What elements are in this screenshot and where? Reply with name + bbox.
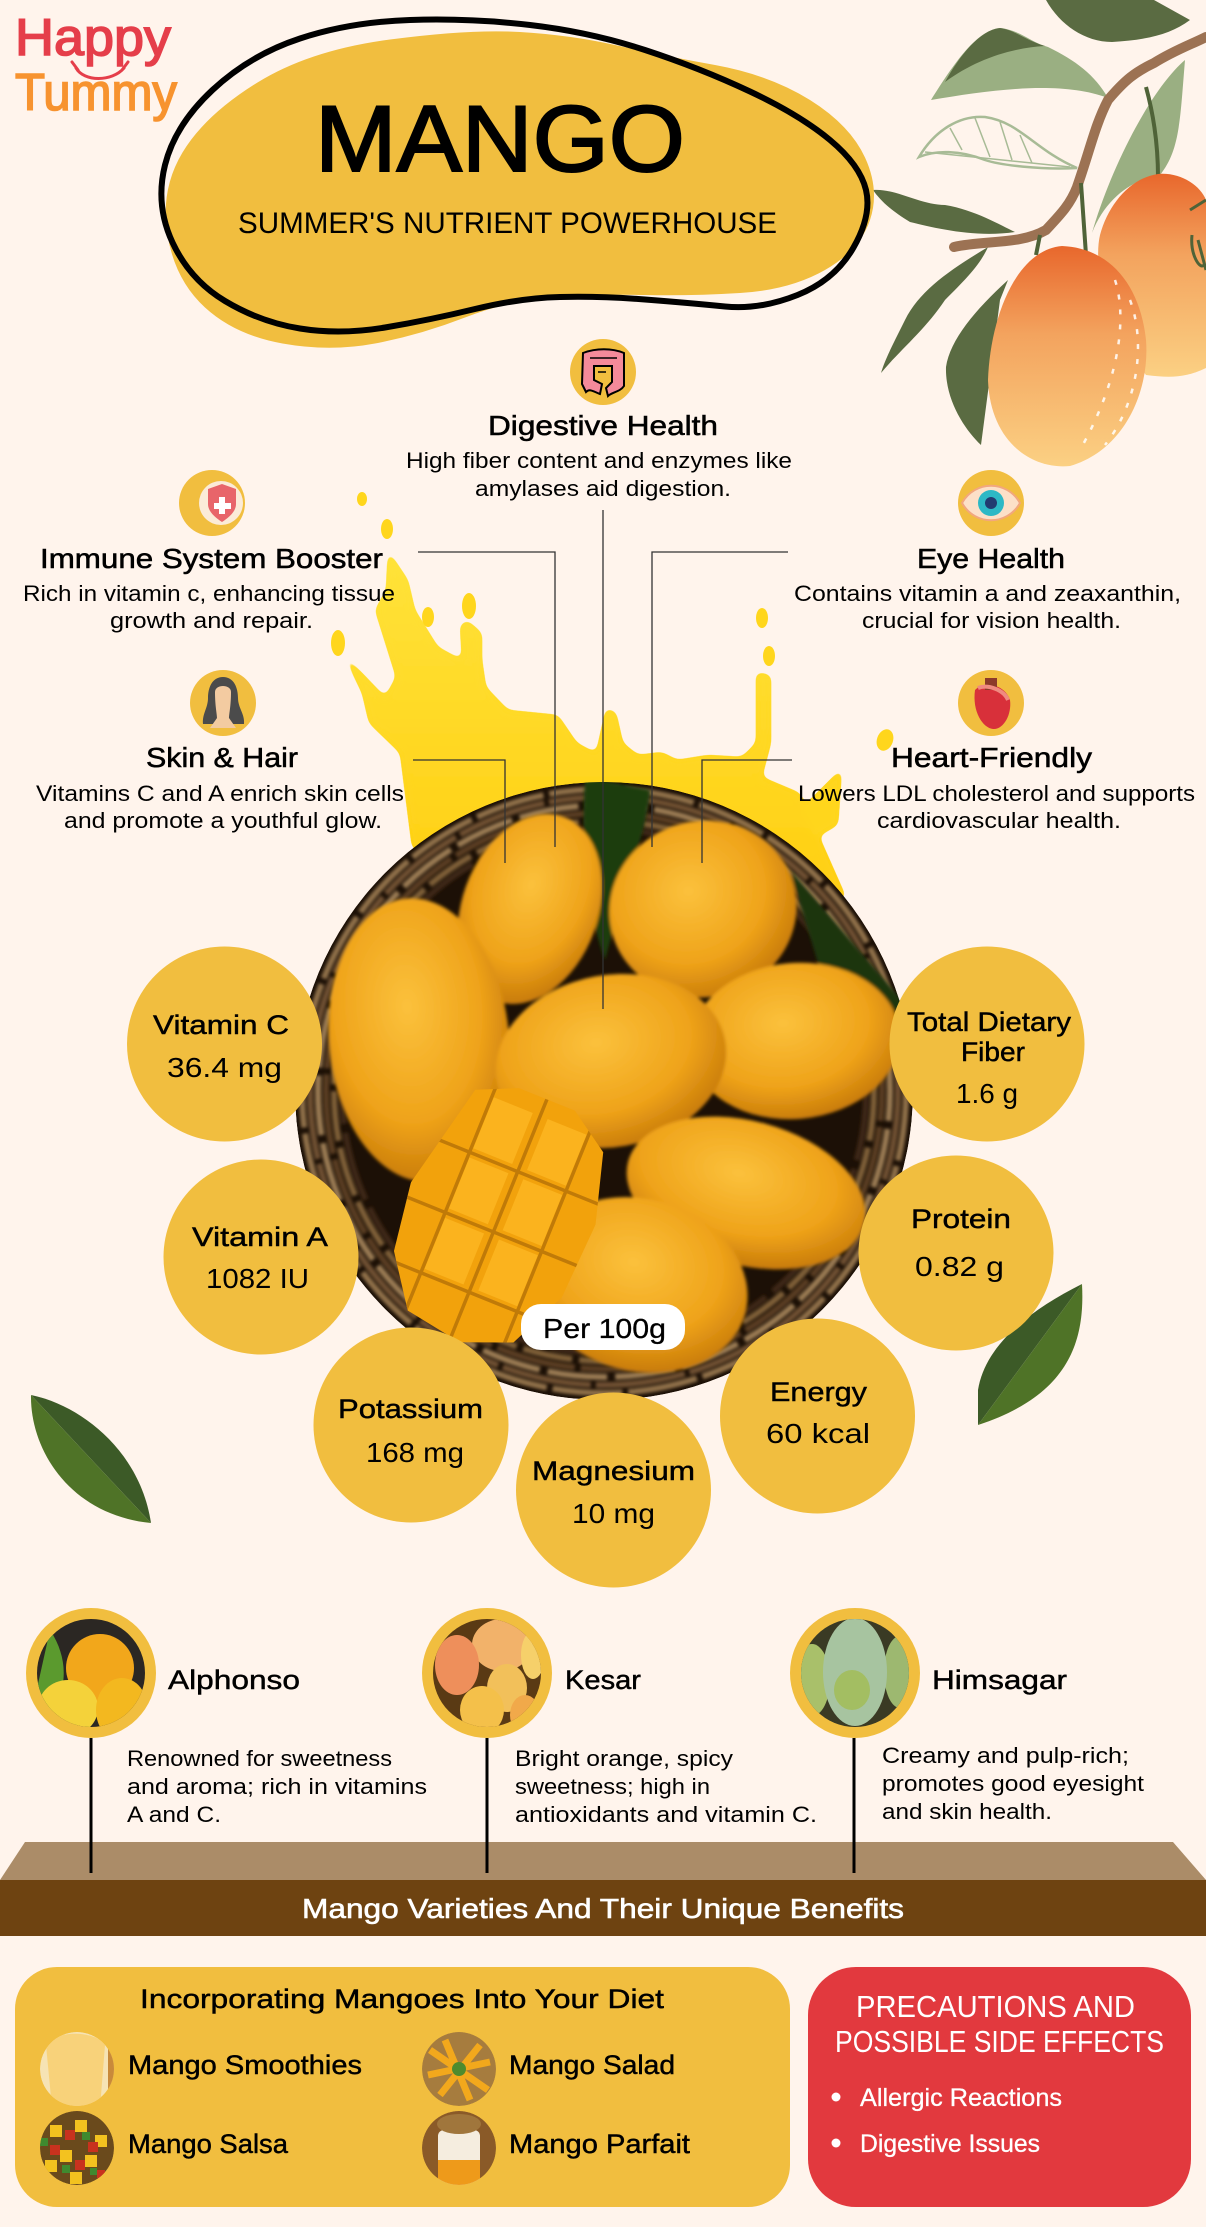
description: A and C. bbox=[127, 1802, 221, 1827]
stat: vitamin c: Vitamin C bbox=[153, 1010, 289, 1040]
stat: vitamin c: 36.4 mg bbox=[167, 1052, 282, 1083]
description: and skin health. bbox=[882, 1799, 1052, 1824]
panel: immune system booster bbox=[23, 470, 395, 633]
heading: Digestive Health bbox=[488, 410, 718, 441]
icon: heart bbox=[958, 670, 1024, 736]
text block bbox=[36, 781, 404, 833]
text block: and promote a youthful glow. bbox=[64, 808, 382, 833]
panel: heart friendly bbox=[798, 670, 1195, 833]
decorative leaf right bbox=[978, 1284, 1082, 1425]
stat: energy bbox=[720, 1318, 915, 1514]
stat: protein: Protein bbox=[911, 1204, 1011, 1234]
icon: intestine bbox=[570, 339, 636, 405]
text block bbox=[23, 581, 395, 633]
text block: amylases aid digestion. bbox=[475, 476, 731, 501]
logo: Happy Tummy bbox=[15, 9, 177, 122]
name: Himsagar bbox=[932, 1665, 1067, 1695]
stat: total dietary fiber bbox=[890, 946, 1084, 1142]
heading: Heart-Friendly bbox=[891, 742, 1092, 773]
stat: potassium: Potassium bbox=[338, 1394, 483, 1424]
panel: eye health bbox=[794, 470, 1181, 633]
panel: precautions bbox=[808, 1967, 1191, 2207]
panel: skin and hair bbox=[36, 670, 404, 833]
per 100g pill: Per 100g bbox=[543, 1313, 666, 1344]
photo bbox=[26, 1608, 156, 1742]
per 100g pill bbox=[521, 1304, 685, 1350]
description bbox=[515, 1746, 817, 1827]
stat: energy: Energy bbox=[770, 1377, 868, 1407]
shelf bbox=[0, 1842, 1206, 1936]
description: Creamy and pulp-rich; bbox=[882, 1743, 1129, 1768]
stat: potassium: 168 mg bbox=[366, 1437, 464, 1468]
food: parfait: Mango Parfait bbox=[509, 2129, 691, 2159]
icon: eye bbox=[958, 470, 1024, 536]
panel: digestive health bbox=[406, 339, 792, 501]
photo bbox=[790, 1608, 920, 1738]
stat: vitamin a bbox=[164, 1160, 358, 1354]
stat: protein: 0.82 g bbox=[915, 1251, 1004, 1282]
food: parfait bbox=[422, 2111, 691, 2190]
food: smoothies: Mango Smoothies bbox=[128, 2050, 362, 2080]
bullet list: Digestive Issues bbox=[860, 2130, 1040, 2158]
text block bbox=[794, 581, 1181, 633]
stat: total dietary fiber: Total Dietary bbox=[907, 1007, 1072, 1037]
description: and aroma; rich in vitamins bbox=[127, 1774, 427, 1799]
description: promotes good eyesight bbox=[882, 1771, 1144, 1796]
description bbox=[882, 1743, 1144, 1824]
text block bbox=[406, 448, 792, 501]
heading: Immune System Booster bbox=[40, 543, 383, 574]
food: salad: Mango Salad bbox=[509, 2050, 675, 2080]
food: salad bbox=[422, 2032, 675, 2106]
stat: vitamin a: 1082 IU bbox=[206, 1263, 309, 1294]
variety: himsagar bbox=[790, 1608, 1144, 1873]
text block bbox=[798, 781, 1195, 833]
text block: crucial for vision health. bbox=[862, 608, 1121, 633]
stat: protein bbox=[858, 1156, 1054, 1350]
stat: vitamin c bbox=[127, 946, 322, 1142]
variety: alphonso bbox=[26, 1608, 427, 1873]
bullet list: Allergic Reactions bbox=[860, 2084, 1062, 2112]
heading: Eye Health bbox=[917, 543, 1065, 574]
text block: Lowers LDL cholesterol and supports bbox=[798, 781, 1195, 806]
stat: magnesium bbox=[516, 1392, 711, 1588]
decorative leaf left bbox=[31, 1395, 151, 1523]
bullet list bbox=[832, 2084, 1062, 2158]
text block: High fiber content and enzymes like bbox=[406, 448, 792, 473]
panel heading: Incorporating Mangoes Into Your Diet bbox=[140, 1984, 665, 2014]
text block: Contains vitamin a and zeaxanthin, bbox=[794, 581, 1181, 606]
description: sweetness; high in bbox=[515, 1774, 710, 1799]
stat: potassium bbox=[314, 1328, 508, 1522]
panel: incorporating mangoes bbox=[15, 1967, 790, 2207]
juice splash bbox=[331, 492, 896, 1000]
variety: kesar bbox=[422, 1608, 817, 1873]
mango basket photo bbox=[295, 780, 913, 1400]
name: Kesar bbox=[565, 1665, 641, 1695]
stat: total dietary fiber: Fiber bbox=[961, 1037, 1025, 1067]
logo: Happy Tummy: Tummy bbox=[15, 64, 177, 122]
photo bbox=[422, 1608, 552, 1738]
description: Bright orange, spicy bbox=[515, 1746, 733, 1771]
logo: Happy Tummy: Happy bbox=[15, 9, 171, 67]
text block: Rich in vitamin c, enhancing tissue bbox=[23, 581, 395, 606]
panel heading bbox=[835, 1989, 1164, 2059]
stat: energy: 60 kcal bbox=[766, 1418, 870, 1449]
panel heading: PRECAUTIONS AND bbox=[856, 1989, 1135, 2024]
title text: MANGO bbox=[315, 86, 685, 191]
illustration: mango branch bbox=[873, 0, 1206, 466]
icon: woman bbox=[190, 670, 256, 736]
title blob bbox=[161, 20, 874, 348]
food: smoothies bbox=[40, 2032, 362, 2108]
food: salsa: Mango Salsa bbox=[128, 2129, 289, 2159]
heading: Skin & Hair bbox=[146, 742, 298, 773]
stat: vitamin a: Vitamin A bbox=[192, 1222, 328, 1252]
name: Alphonso bbox=[168, 1665, 300, 1695]
food: salsa bbox=[40, 2111, 289, 2185]
subtitle: SUMMER'S NUTRIENT POWERHOUSE bbox=[238, 207, 777, 240]
stat: total dietary fiber: 1.6 g bbox=[956, 1078, 1018, 1109]
stat: magnesium: Magnesium bbox=[532, 1456, 695, 1486]
description bbox=[127, 1746, 427, 1827]
text block: Vitamins C and A enrich skin cells bbox=[36, 781, 404, 806]
description: Renowned for sweetness bbox=[127, 1746, 392, 1771]
shelf title: Mango Varieties And Their Unique Benefits bbox=[302, 1893, 904, 1924]
stat: magnesium: 10 mg bbox=[572, 1498, 655, 1529]
connector lines bbox=[413, 510, 792, 1009]
description: antioxidants and vitamin C. bbox=[515, 1802, 817, 1827]
cut mango bbox=[394, 1088, 604, 1342]
text block: cardiovascular health. bbox=[877, 808, 1121, 833]
text block: growth and repair. bbox=[110, 608, 313, 633]
icon: shield bbox=[179, 470, 245, 536]
